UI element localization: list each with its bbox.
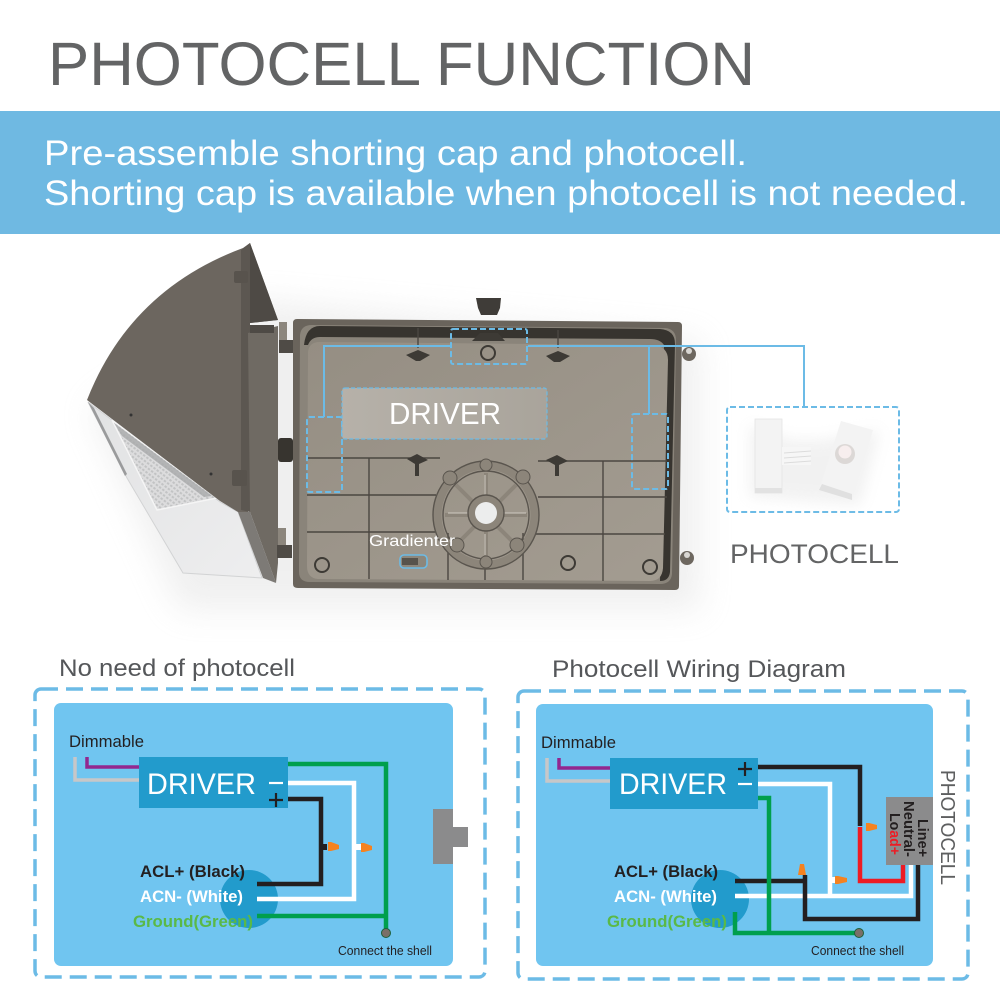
photocell block: Lo ad+ (886, 813, 903, 855)
driver box (139, 757, 288, 808)
input labels: ACN- (White) (140, 887, 243, 906)
input labels (133, 862, 253, 931)
photocell sensor (819, 421, 873, 500)
driver label: DRIVER (389, 396, 501, 431)
fixture inner lens pattern (112, 420, 217, 510)
dimmable label: Dimmable (541, 733, 616, 752)
subtitle banner: Pre-assemble shorting cap and photocell. (44, 134, 747, 173)
right bolts (680, 347, 696, 565)
white wires (735, 784, 911, 896)
callout box: left photocell position (307, 417, 342, 492)
panel: photocell wiring diagram (518, 691, 968, 979)
input labels: ACN- (White) (614, 887, 717, 906)
input labels: ACL+ (Black) (140, 862, 245, 881)
input labels: Ground(Green) (607, 912, 727, 931)
dashed frame (518, 691, 968, 979)
callout lines (324, 346, 804, 417)
mounting ring (433, 459, 539, 569)
green wire (257, 764, 386, 933)
hood rib (241, 243, 250, 512)
product shadow (90, 300, 700, 610)
floor tabs and screw bosses (406, 333, 570, 476)
ground label: Connect the shell (338, 944, 432, 958)
ground terminal (382, 928, 390, 938)
input labels: ACL+ (Black) (614, 862, 718, 881)
driver box: DRIVER (147, 768, 256, 801)
hood latches (130, 271, 248, 486)
white wire (257, 783, 354, 899)
textured door strip (248, 326, 278, 583)
photocell callout (727, 407, 899, 569)
top and right dark rim (304, 326, 675, 581)
lens dark band (114, 423, 212, 497)
ground terminal (854, 928, 864, 938)
input labels: Ground(Green) (133, 912, 253, 931)
driver label (342, 388, 547, 439)
green wire (735, 798, 859, 933)
black wires (735, 767, 918, 919)
wire nuts (321, 842, 372, 852)
heading: photocell wiring diagram: Photocell Wiring Diagram (552, 656, 846, 683)
wire nuts (798, 823, 877, 884)
housing inner wall (299, 325, 676, 584)
floor ribs (307, 328, 667, 581)
photocell label: PHOTOCELL (730, 539, 899, 569)
callout box: top photocell position (451, 329, 527, 364)
ground label: Connect the shell (811, 944, 904, 958)
photocell shadow (750, 425, 880, 505)
dashed frame (35, 689, 485, 977)
fixture hood (87, 243, 278, 512)
callout box: right photocell position (632, 414, 668, 489)
dimming wires (75, 757, 139, 780)
vertical photocell label: PHOTOCELL (936, 770, 959, 885)
gradienter icon (400, 555, 427, 568)
black wire (257, 799, 321, 884)
housing shell (293, 319, 682, 590)
input labels (607, 862, 727, 931)
input circle (691, 870, 749, 928)
blue board (54, 703, 453, 966)
photocell dashed frame (727, 407, 899, 512)
white stub (830, 877, 835, 883)
shorting cap (755, 419, 811, 493)
door top bar (250, 325, 274, 333)
dimming wires (547, 758, 610, 781)
driver box (610, 758, 758, 809)
photocell block: Neutral- (900, 801, 917, 857)
fixture lens (88, 402, 262, 578)
subtitle banner (0, 111, 1000, 234)
lens side sliver (88, 402, 127, 476)
bottom wedge (238, 512, 276, 583)
subtitle banner: Shorting cap is available when photocell is not needed. (44, 174, 968, 213)
panel: no need of photocell (35, 689, 485, 977)
photocell block (886, 797, 933, 865)
dimmable label: Dimmable (69, 732, 144, 751)
photocell block: Line+ (914, 819, 931, 857)
blue board (536, 704, 933, 966)
housing floor (307, 342, 668, 581)
photocell socket (433, 809, 468, 864)
product: wall pack fixture (87, 243, 804, 610)
gradienter label: Gradienter (369, 533, 456, 550)
heading: no need of photocell: No need of photocell (59, 655, 295, 682)
hinges and side connector (277, 322, 293, 558)
input circle (220, 870, 278, 928)
top connector (476, 298, 501, 315)
driver box: DRIVER (619, 768, 727, 801)
red wire (860, 827, 903, 881)
title: PHOTOCELL FUNCTION (48, 30, 755, 98)
